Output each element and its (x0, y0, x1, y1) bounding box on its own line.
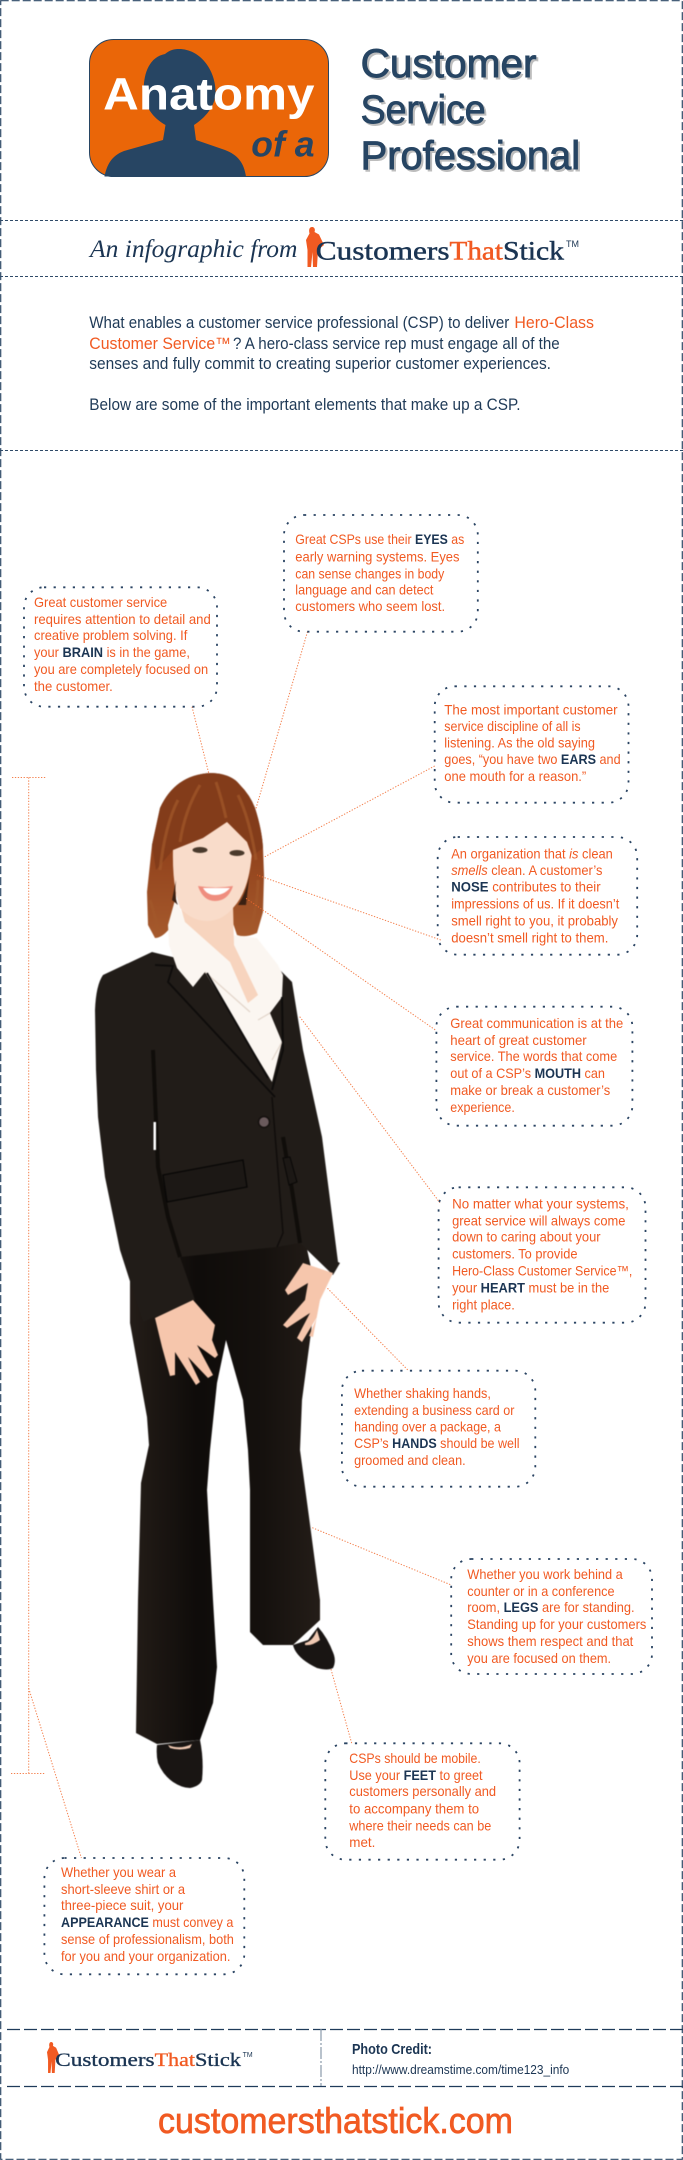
callout: nose: doesn’t smell right to them. (451, 929, 608, 945)
callout: brain: your BRAIN is in the game, (34, 644, 190, 660)
subtitle: an infographic from CustomersThatStick: Stick (503, 236, 564, 265)
height measuring bar (11, 778, 46, 1774)
callout: nose: An organization that is clean (451, 845, 613, 861)
callout: ears: service discipline of all is (444, 718, 581, 734)
callout: feet: where their needs can be (348, 1817, 491, 1833)
callout: brain: Great customer service (34, 594, 167, 610)
callout: brain (24, 587, 217, 707)
shirt (168, 900, 283, 1082)
intro text: Below are some of the important elements that make up a CSP. (89, 396, 521, 414)
subtitle: an infographic from CustomersThatStick (88, 227, 579, 267)
callout: legs: room, LEGS are for standing. (467, 1599, 635, 1615)
callout: mouth: service. The words that come (450, 1048, 617, 1064)
photo credit: Photo Credit: (352, 2041, 432, 2058)
callout: legs: shows them respect and that (467, 1633, 633, 1649)
callout: appearance: short-sleeve shirt or a (61, 1881, 185, 1897)
callout: appearance: three-piece suit, your (61, 1897, 184, 1913)
callout: nose: impressions of us. If it doesn’t (451, 895, 619, 911)
callout: heart: customers. To provide (452, 1245, 578, 1261)
callout: hands: extending a business card or (354, 1402, 515, 1418)
callout: mouth: experience. (450, 1099, 515, 1115)
callout: mouth: heart of great customer (450, 1032, 587, 1048)
face (173, 820, 252, 921)
icon: orange leaning figure (306, 227, 324, 267)
callout: legs: Standing up for your customers (467, 1616, 646, 1632)
icon: orange leaning figure small (47, 2042, 60, 2073)
callout: legs (451, 1559, 652, 1674)
title: Professional (361, 134, 580, 178)
button (258, 1116, 270, 1128)
right shoe (293, 1627, 335, 1670)
callout: legs: Whether you work behind a (467, 1566, 623, 1582)
intro text: ? A hero-class service rep must engage all of the (233, 335, 560, 353)
callout: legs: you are focused on them. (467, 1650, 611, 1666)
right hand (283, 1263, 333, 1342)
callout: hands: CSP’s HANDS should be well (354, 1435, 520, 1451)
callout: ears: listening. As the old saying (444, 734, 595, 750)
left hand (155, 1300, 218, 1385)
callout: heart: Hero-Class Customer Service™, (452, 1262, 632, 1278)
callout: feet (325, 1743, 520, 1860)
hair bangs (152, 773, 263, 870)
intro text: senses and fully commit to creating superior customer experiences. (89, 355, 551, 373)
trousers (130, 1240, 320, 1744)
subtitle: an infographic from CustomersThatStick: Customers (316, 236, 450, 265)
callout: ears (435, 686, 628, 803)
callout: feet: met. (349, 1834, 375, 1850)
callout: heart: No matter what your systems, (452, 1195, 629, 1211)
callout: eyes: Great CSPs use their EYES as (295, 531, 464, 547)
title (361, 42, 580, 178)
eyes (192, 847, 208, 853)
callout: mouth: out of a CSP’s MOUTH can (450, 1065, 605, 1081)
callout: hands (342, 1371, 535, 1487)
callout: ears: The most important customer (444, 701, 618, 717)
intro text: Hero-Class (514, 314, 594, 332)
footer logo: Customers (55, 2050, 155, 2071)
logo badge: Anatomy of a: Anatomy (103, 68, 314, 119)
logo badge: Anatomy of a: of a (251, 124, 314, 165)
subtitle: an infographic from CustomersThatStick: An infographic from (88, 236, 298, 263)
footer logo (47, 2042, 253, 2073)
callout: eyes: customers who seem lost. (295, 598, 445, 614)
callout: heart (439, 1187, 646, 1323)
pockets (163, 1160, 247, 1202)
callout: feet: CSPs should be mobile. (349, 1750, 481, 1766)
callout: appearance: sense of professionalism, both (61, 1931, 234, 1947)
lapel lines (155, 965, 275, 1097)
jacket (95, 950, 340, 1322)
neck and chest (180, 905, 258, 1003)
photo credit: http://www.dreamstime.com/time123_info (352, 2063, 569, 2077)
photo: woman in black suit (95, 773, 340, 1788)
callout: nose: smell right to you, it probably (451, 912, 618, 928)
callout: legs: counter or in a conference (467, 1583, 615, 1599)
callout: brain: requires attention to detail and (34, 611, 211, 627)
intro text: Customer Service™ (89, 335, 231, 353)
callout: nose: NOSE contributes to their (451, 878, 601, 894)
callout: mouth: Great communication is at the (450, 1015, 623, 1031)
callout: eyes: early warning systems. Eyes (295, 548, 460, 564)
intro text: What enables a customer service professional (CSP) to deliver (89, 314, 510, 332)
footer logo: Stick (195, 2050, 241, 2071)
logo badge: Anatomy of a (90, 40, 328, 176)
callout: ears: goes, “you have two EARS and (444, 751, 621, 767)
callout: feet: to accompany them to (349, 1800, 479, 1816)
subtitle: an infographic from CustomersThatStick: That (450, 236, 504, 265)
callout: feet: Use your FEET to greet (349, 1767, 483, 1783)
callout: eyes (284, 515, 478, 632)
callout: nose (438, 837, 637, 955)
callout: nose: smells clean. A customer’s (451, 862, 602, 878)
hair back (147, 773, 264, 938)
callout: appearance: for you and your organization. (61, 1948, 230, 1964)
callout: brain: the customer. (34, 678, 113, 694)
callout: appearance (44, 1858, 244, 1974)
subtitle: an infographic from CustomersThatStick: TM (566, 239, 579, 249)
icon: head and shoulders silhouette (104, 49, 246, 176)
callout: appearance: Whether you wear a (61, 1864, 176, 1880)
callout: mouth: make or break a customer’s (450, 1082, 610, 1098)
title: Customer (361, 42, 537, 86)
callout: brain: creative problem solving. If (34, 627, 187, 643)
callout: feet: customers personally and (349, 1783, 496, 1799)
intro text (89, 314, 594, 414)
photo credit (352, 2041, 569, 2077)
callout: hands: groomed and clean. (354, 1452, 466, 1468)
smile (198, 886, 233, 901)
callout: heart: down to caring about your (452, 1228, 601, 1244)
footer logo: That (155, 2050, 196, 2071)
callout: heart: your HEART must be in the (452, 1279, 609, 1295)
footer logo: TM (243, 2052, 253, 2059)
callout: eyes: can sense changes in body (295, 565, 444, 581)
left shoe (157, 1740, 203, 1788)
callout: brain: you are completely focused on (34, 661, 208, 677)
callout: eyes: language and can detect (295, 581, 433, 597)
callout: heart: right place. (452, 1296, 515, 1312)
callout: ears: one mouth for a reason.” (444, 768, 587, 784)
callout: heart: great service will always come (452, 1212, 626, 1228)
title: Service (361, 88, 486, 132)
callout: appearance: APPEARANCE must convey a (61, 1914, 234, 1930)
callout: hands: handing over a package, a (354, 1418, 501, 1434)
website url: customersthatstick.com (158, 2100, 513, 2141)
callout: hands: Whether shaking hands, (354, 1385, 491, 1401)
callout: mouth (436, 1007, 632, 1126)
connector lines (29, 632, 451, 1858)
jacket shading (153, 1050, 300, 1257)
